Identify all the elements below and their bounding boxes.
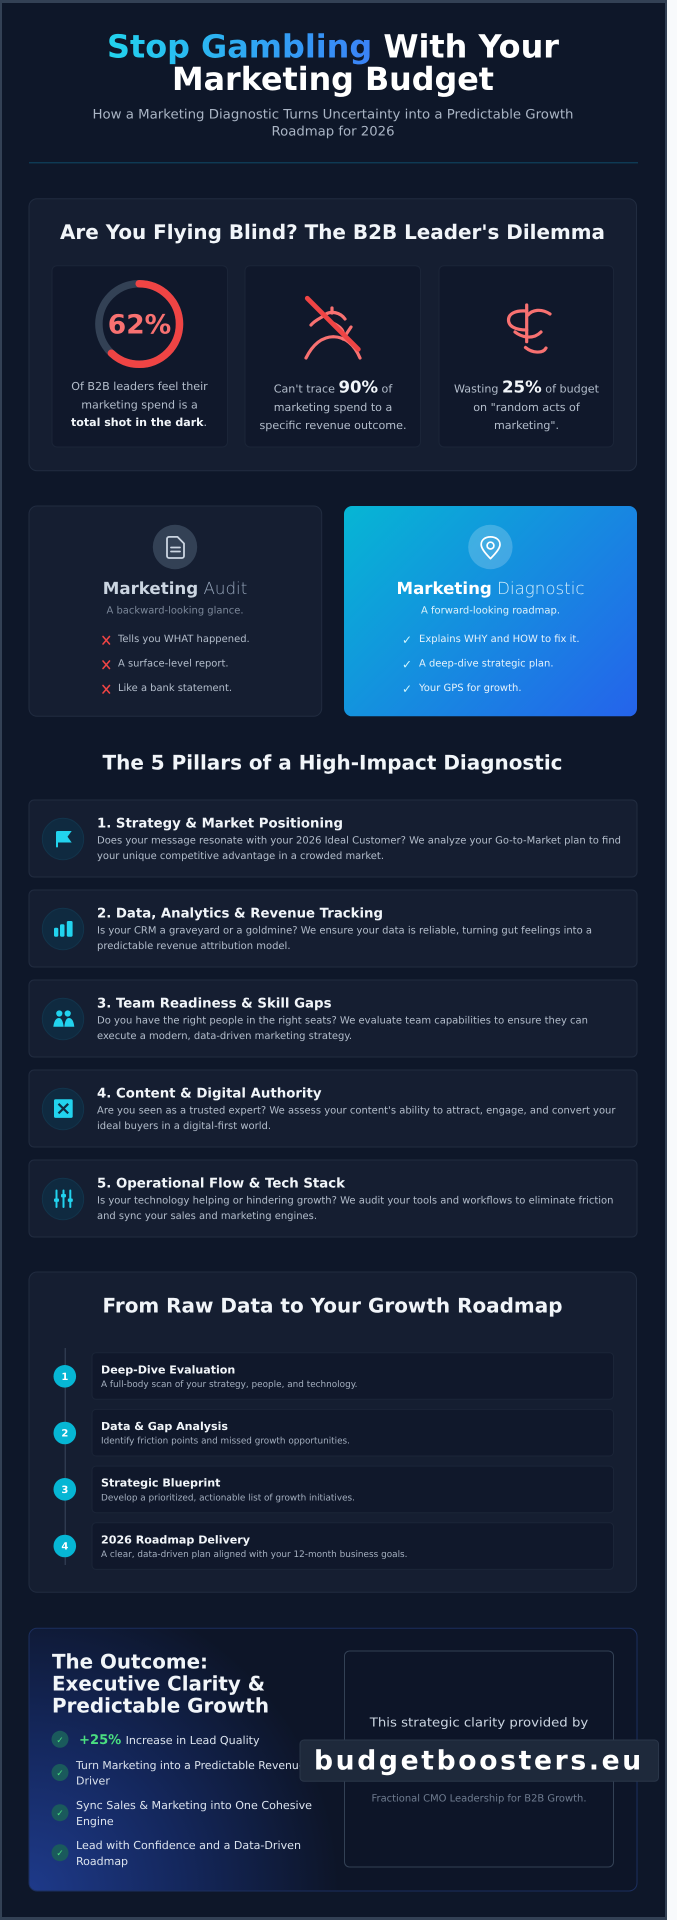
outcome: confidence: Roadmap — [76, 1855, 128, 1868]
step 2: Identify friction points and missed growth opportunities. — [101, 1437, 350, 1447]
pillar 2: 2. Data, Analytics & Revenue Tracking — [97, 907, 383, 922]
heading: diagnostic: Marketing Diagnostic — [396, 579, 584, 598]
audit list: A surface-level report. — [118, 659, 228, 670]
audit list — [103, 634, 250, 694]
outcome: sales sync: Engine — [76, 1815, 114, 1828]
diagnostic list: ✓ — [402, 682, 412, 696]
diagnostic list — [402, 633, 580, 696]
pillar 3: 3. Team Readiness & Skill Gaps — [97, 997, 332, 1012]
stat card: 62% — [52, 266, 228, 447]
pillar 5: Is your technology helping or hindering growth? We audit your tools and workflows to eliminate friction — [97, 1195, 614, 1206]
pillar 5: 5. Operational Flow & Tech Stack — [97, 1177, 346, 1192]
donut chart: 62% — [99, 284, 180, 364]
stat text — [454, 378, 600, 432]
icon: sliders — [42, 1178, 84, 1220]
title — [107, 27, 559, 98]
step 4: A clear, data-driven plan aligned with your 12-month business goals. — [101, 1550, 408, 1560]
icon: crossed box — [42, 1088, 84, 1130]
panel: marketing diagnostic — [344, 506, 637, 716]
audit tagline: A backward-looking glance. — [106, 605, 244, 616]
pillar 1: your unique competitive advantage in a crowded market. — [97, 851, 384, 862]
brand badge — [300, 1740, 658, 1781]
panel: dilemma — [29, 199, 636, 471]
icon: bar chart — [42, 908, 84, 950]
panel: roadmap — [29, 1272, 636, 1592]
pillar 2: predictable revenue attribution model. — [97, 941, 290, 952]
title: Stop Gambling With Your — [107, 27, 559, 65]
stat text: Can't trace 90% of — [274, 378, 393, 397]
icon: crossed-out dollar — [306, 298, 360, 358]
pillar 4: 4. Content & Digital Authority — [97, 1087, 322, 1102]
panel: marketing audit — [29, 506, 322, 716]
outcome: confidence — [52, 1839, 301, 1868]
step 2: Data & Gap Analysis — [101, 1420, 228, 1433]
stat card: 90% — [245, 266, 420, 447]
icon: flag — [42, 818, 84, 860]
icon: team — [42, 998, 84, 1040]
pillar 1 — [29, 800, 637, 877]
pillar 1: Does your message resonate with your 2026 Ideal Customer? We analyze your Go-to-Market plan to find — [97, 835, 621, 846]
stat text: marketing spend is a — [81, 398, 198, 411]
step 1: A full-body scan of your strategy, people, and technology. — [101, 1380, 358, 1390]
pillar 3: execute a modern, data-driven marketing strategy. — [97, 1031, 352, 1042]
stat text: marketing". — [494, 419, 559, 432]
outcome: revenue driver: ✓ — [56, 1769, 64, 1779]
pillar 4 — [29, 1070, 637, 1147]
outcome: confidence: Lead with Confidence and a Data-Driven — [76, 1839, 301, 1852]
diagnostic list: A deep-dive strategic plan. — [419, 659, 554, 670]
outcome: lead quality: +25% — [79, 1733, 121, 1748]
subtitle: Roadmap for 2026 — [272, 125, 394, 140]
outcome: lead quality — [52, 1731, 260, 1748]
stat text: Wasting 25% of budget — [454, 378, 600, 397]
heading: outcome: Predictable Growth — [52, 1694, 269, 1718]
step 3 — [54, 1466, 614, 1513]
step 2 — [54, 1409, 614, 1456]
diagnostic tagline: A forward-looking roadmap. — [421, 605, 560, 616]
stat text — [260, 378, 406, 432]
subtitle — [92, 107, 574, 140]
pillar 5: and sync your sales and marketing engines. — [97, 1211, 317, 1222]
outcome: revenue driver: Turn Marketing into a Predictable Revenue — [75, 1759, 306, 1772]
step 4 — [54, 1523, 614, 1569]
stat text: specific revenue outcome. — [260, 419, 406, 432]
pillar 1: 1. Strategy & Market Positioning — [97, 817, 343, 832]
stat card: 25% — [439, 266, 614, 447]
header — [29, 27, 638, 163]
provider box: Fractional CMO Leadership for B2B Growth. — [372, 1794, 586, 1805]
heading: outcome: The Outcome: — [52, 1649, 208, 1673]
step 4: 2026 Roadmap Delivery — [101, 1533, 250, 1546]
icon: broken currency symbol — [508, 305, 550, 352]
diagnostic list: Explains WHY and HOW to fix it. — [419, 634, 580, 645]
heading: roadmap: From Raw Data to Your Growth Roadmap — [102, 1293, 562, 1317]
panel: outcome — [29, 1628, 658, 1891]
icon: document — [153, 525, 197, 569]
provider box: This strategic clarity provided by — [369, 1716, 588, 1730]
diagnostic list: ✓ — [402, 633, 412, 647]
timeline line — [65, 1348, 66, 1565]
step 2: 2 — [61, 1429, 68, 1440]
diagnostic list: ✓ — [402, 658, 412, 672]
stat text — [71, 380, 208, 429]
pillar 3 — [29, 980, 637, 1057]
brand badge: budgetboosters.eu — [314, 1745, 644, 1776]
stat text: Of B2B leaders feel their — [71, 380, 208, 393]
outcome: lead quality: ✓ — [56, 1736, 64, 1746]
subtitle: How a Marketing Diagnostic Turns Uncertainty into a Predictable Growth — [92, 107, 574, 122]
stat text: on "random acts of — [473, 401, 581, 414]
diagnostic list: Your GPS for growth. — [418, 683, 522, 694]
outcome: sales sync: ✓ — [56, 1809, 64, 1819]
stat text: total shot in the dark. — [71, 416, 207, 429]
stat text: marketing spend to a — [274, 401, 392, 414]
pillar 2 — [29, 890, 637, 967]
outcome: confidence: ✓ — [56, 1849, 64, 1859]
step 3: 3 — [61, 1485, 68, 1496]
pillar 3: Do you have the right people in the right seats? We evaluate team capabilities to ensure they can — [97, 1015, 588, 1026]
donut chart: 62%: 62% — [108, 309, 171, 340]
heading: outcome: Executive Clarity & — [52, 1672, 265, 1696]
heading: pillars: The 5 Pillars of a High-Impact Diagnostic — [102, 750, 562, 774]
step 1 — [54, 1353, 614, 1399]
icon: location pin — [468, 525, 513, 569]
pillar 5 — [29, 1160, 637, 1237]
heading: outcome — [52, 1649, 269, 1718]
audit list: Tells you WHAT happened. — [117, 634, 250, 645]
title: Marketing Budget — [172, 60, 494, 98]
audit list: Like a bank statement. — [118, 683, 232, 694]
outcome: revenue driver: Driver — [76, 1774, 110, 1788]
step 1: Deep-Dive Evaluation — [101, 1363, 235, 1376]
outcome: sales sync — [52, 1799, 312, 1828]
heading: audit: Marketing Audit — [103, 579, 247, 598]
pillar 2: Is your CRM a graveyard or a goldmine? We ensure your data is reliable, turning gut feelings into a — [97, 925, 592, 936]
step 3: Develop a prioritized, actionable list of growth initiatives. — [101, 1493, 355, 1503]
step 4: 4 — [61, 1542, 68, 1553]
pillar 4: Are you seen as a trusted expert? We assess your content's ability to attract, engage, and convert your — [97, 1105, 616, 1116]
outcome: sales sync: Sync Sales & Marketing into One Cohesive — [76, 1799, 312, 1812]
step 1: 1 — [61, 1372, 68, 1383]
heading: dilemma: Are You Flying Blind? The B2B Leader's Dilemma — [60, 220, 605, 244]
outcome: lead quality: Increase in Lead Quality — [126, 1734, 260, 1747]
pillar 4: ideal buyers in a digital-first world. — [97, 1121, 271, 1132]
step 3: Strategic Blueprint — [101, 1477, 220, 1490]
provider box — [344, 1651, 614, 1867]
outcome: revenue driver — [52, 1759, 306, 1788]
